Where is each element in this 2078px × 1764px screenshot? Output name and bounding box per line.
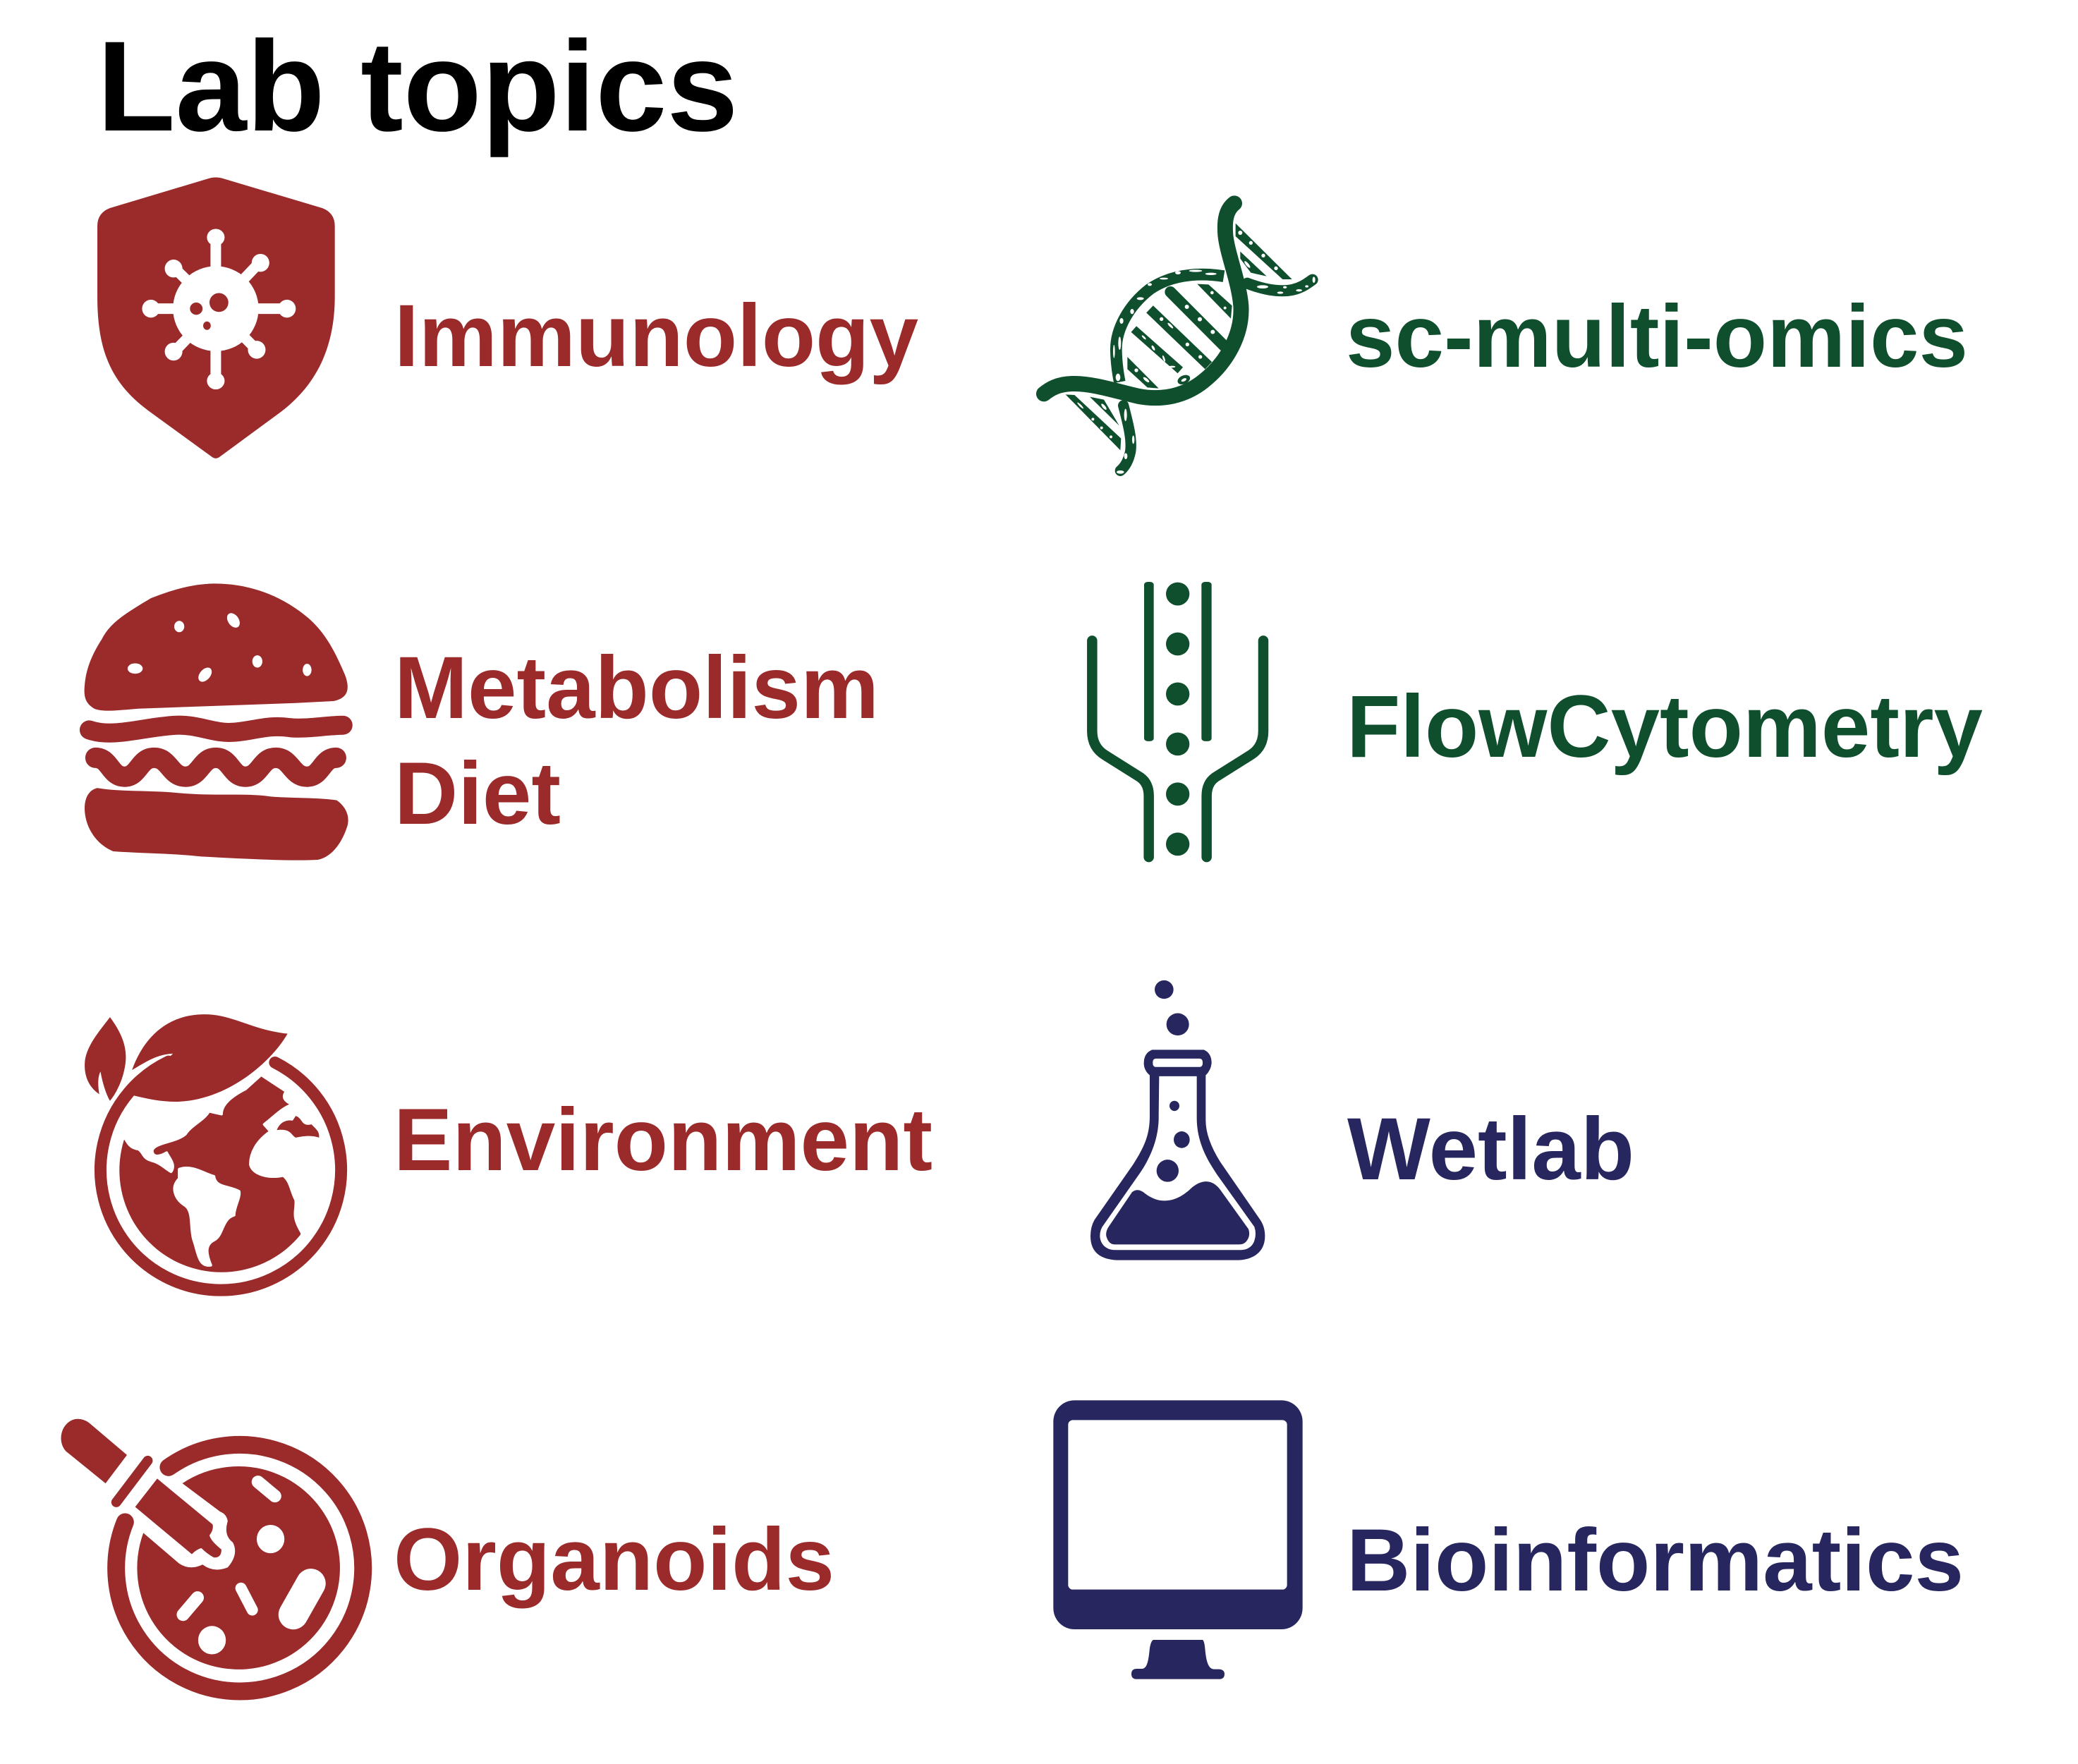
base pair rungs [1066, 224, 1292, 450]
icon: flask [1090, 980, 1265, 1260]
label: Immunology: Immunology [394, 287, 918, 385]
label: FlowCytometry: FlowCytometry [1347, 678, 1983, 776]
icon: virus shield [97, 177, 335, 458]
secondary strand [1113, 269, 1316, 474]
label: Wetlab: Wetlab [1347, 1100, 1634, 1198]
label: sc-multi-omics: sc-multi-omics [1346, 288, 1968, 386]
label: Bioinformatics: Bioinformatics [1347, 1511, 1964, 1610]
icon: DNA helix [1044, 203, 1316, 474]
panel: immunology [97, 177, 918, 458]
icon: computer monitor [1053, 1400, 1303, 1679]
title: Lab topics [97, 14, 738, 158]
label: Metabolism: Metabolism [394, 639, 879, 737]
icon: earth with leaf [85, 1014, 353, 1290]
label: Environment: Environment [394, 1091, 932, 1189]
label: Organoids: Organoids [394, 1511, 834, 1609]
panel: wetlab [1090, 980, 1634, 1260]
panel: organoids [61, 1419, 834, 1691]
icon: burger [85, 583, 348, 860]
label: Diet: Diet [394, 745, 561, 843]
icon: petri dish with dropper [61, 1419, 363, 1691]
panel: flow cytometry [1092, 582, 1983, 857]
panel: environment [85, 1014, 932, 1290]
icon: flow channel [1092, 582, 1263, 857]
panel: sc-multi-omics [1044, 203, 1968, 474]
panel: bioinformatics [1053, 1400, 1964, 1679]
panel: metabolism and diet [85, 583, 879, 860]
